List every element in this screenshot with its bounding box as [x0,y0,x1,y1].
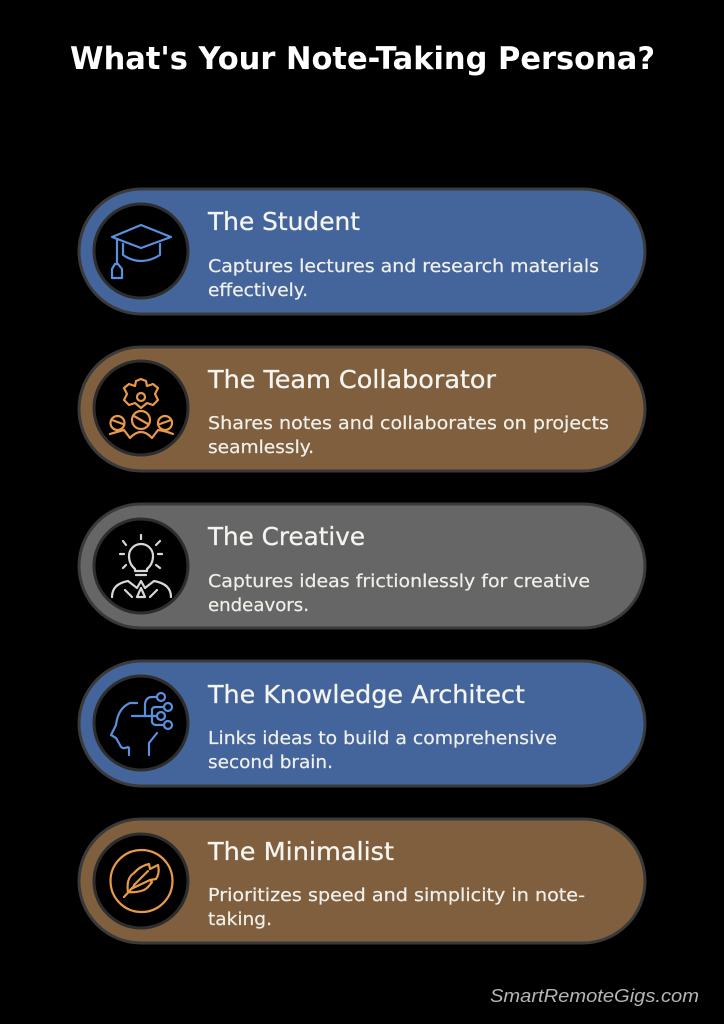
icon: team with gear [110,379,173,438]
title: What's Your Note-Taking Persona? [70,41,655,77]
description: The Minimalist: Prioritizes speed and simplicity in note- [208,885,585,906]
icon: feather in circle [110,850,172,912]
description: The Student: Captures lectures and research materials [208,256,599,277]
description: The Creative: endeavors. [208,595,309,616]
description: The Knowledge Architect: second brain. [208,752,333,773]
panel: The Student [79,189,645,314]
heading: The Team Collaborator: The Team Collaborator [207,365,497,394]
description: The Creative: Captures ideas frictionlessly for creative [208,571,590,592]
heading: The Creative: The Creative [207,522,365,551]
footer watermark: SmartRemoteGigs.com [490,986,699,1006]
panel: The Team Collaborator [79,347,645,471]
description: The Knowledge Architect: Links ideas to build a comprehensive [208,728,557,749]
description: The Team Collaborator: seamlessly. [208,437,314,458]
heading: The Knowledge Architect: The Knowledge Architect [207,680,525,709]
description: The Minimalist: taking. [208,909,272,930]
icon: head with circuit nodes [111,693,172,755]
icon: graduation cap [112,225,171,278]
description: The Team Collaborator [208,413,609,458]
description: The Student [208,256,599,301]
description: The Minimalist [208,885,585,930]
description: The Knowledge Architect [208,728,557,773]
description: The Student: effectively. [208,280,308,301]
description: The Team Collaborator: Shares notes and collaborates on projects [208,413,609,434]
icon: light bulb person [112,535,171,597]
heading: The Student: The Student [207,207,360,236]
description: The Creative [208,571,590,616]
panel: The Creative [79,504,645,628]
panel: The Minimalist [79,819,645,943]
heading: The Minimalist: The Minimalist [207,837,394,866]
panel: The Knowledge Architect [79,661,645,786]
